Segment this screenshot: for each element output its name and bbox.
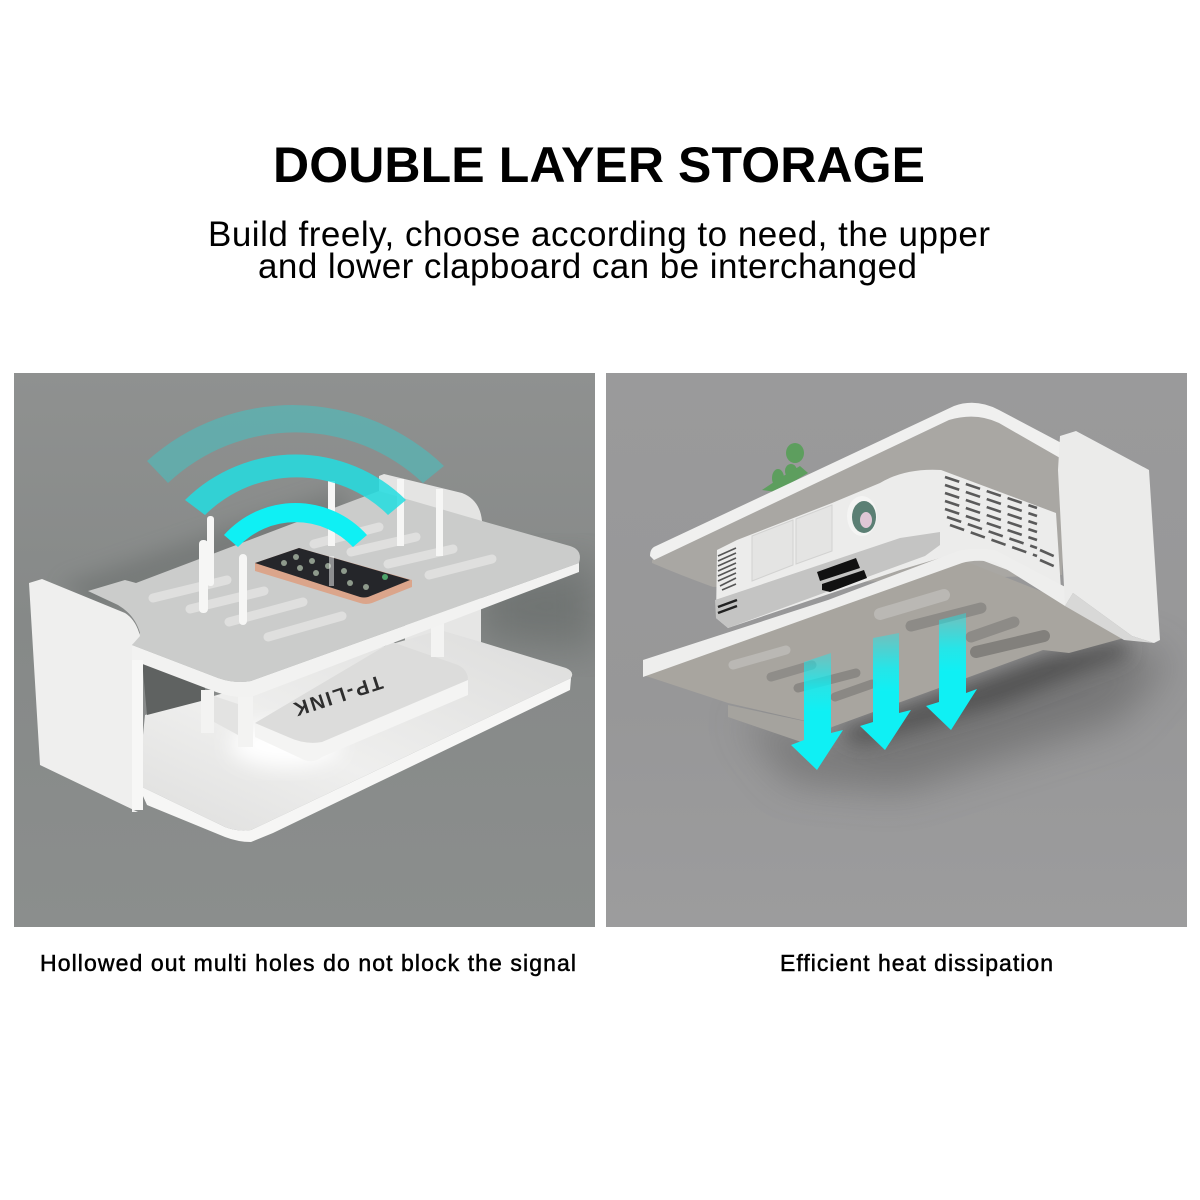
shelf front edge bbox=[132, 563, 579, 697]
lower board bbox=[643, 549, 1124, 745]
panel: heat dissipation shelf bbox=[606, 373, 1187, 927]
left vent bbox=[718, 548, 736, 590]
shelf slots bbox=[153, 527, 492, 637]
light glow under router bbox=[232, 727, 333, 769]
projector panels bbox=[752, 505, 832, 581]
phone bbox=[255, 548, 412, 604]
subtitle bbox=[208, 215, 990, 286]
router logo: TP-LINK bbox=[290, 670, 385, 720]
rear stand bbox=[405, 598, 481, 642]
panel: signal shelf bbox=[14, 373, 595, 927]
subtitle: and lower clapboard can be interchanged bbox=[258, 247, 917, 286]
front vent bbox=[718, 600, 737, 613]
projector bbox=[715, 470, 1061, 628]
icon: plant bbox=[762, 443, 808, 492]
bracket back plate bbox=[1058, 431, 1160, 643]
router bbox=[255, 642, 468, 761]
arrow: right airflow bbox=[926, 613, 977, 730]
panel background bbox=[606, 373, 1187, 927]
board slots bbox=[733, 595, 1044, 697]
grey base plate bbox=[715, 532, 940, 628]
shadow under shelf bbox=[740, 640, 1170, 790]
rear fence bbox=[379, 474, 482, 521]
shelf top surface bbox=[88, 491, 580, 682]
upper board bbox=[650, 403, 1069, 587]
icon: wifi signal arcs bbox=[147, 405, 444, 547]
arrow: middle airflow bbox=[860, 633, 911, 750]
support posts bbox=[201, 615, 444, 747]
lens bbox=[852, 501, 876, 533]
antennas bbox=[199, 479, 443, 625]
panel background bbox=[14, 373, 595, 927]
bracket back plate bbox=[29, 579, 143, 812]
board rim bbox=[643, 549, 1071, 677]
subtitle: Build freely, choose according to need, the upper bbox=[208, 215, 990, 254]
wall shadows bbox=[60, 490, 595, 650]
caption: heat dissipation: Efficient heat dissipation bbox=[780, 950, 1053, 976]
arrow: left airflow bbox=[791, 653, 843, 770]
right vent bbox=[945, 477, 1058, 568]
lower shelf bbox=[138, 630, 572, 842]
black vent bbox=[817, 558, 867, 592]
title: DOUBLE LAYER STORAGE bbox=[273, 137, 925, 193]
underside rear step bbox=[728, 705, 832, 745]
opening behind shelf bbox=[142, 660, 205, 715]
board underside bbox=[646, 577, 1122, 727]
upper shelf bbox=[88, 474, 580, 697]
caption: signal: Hollowed out multi holes do not block the signal bbox=[40, 950, 576, 976]
